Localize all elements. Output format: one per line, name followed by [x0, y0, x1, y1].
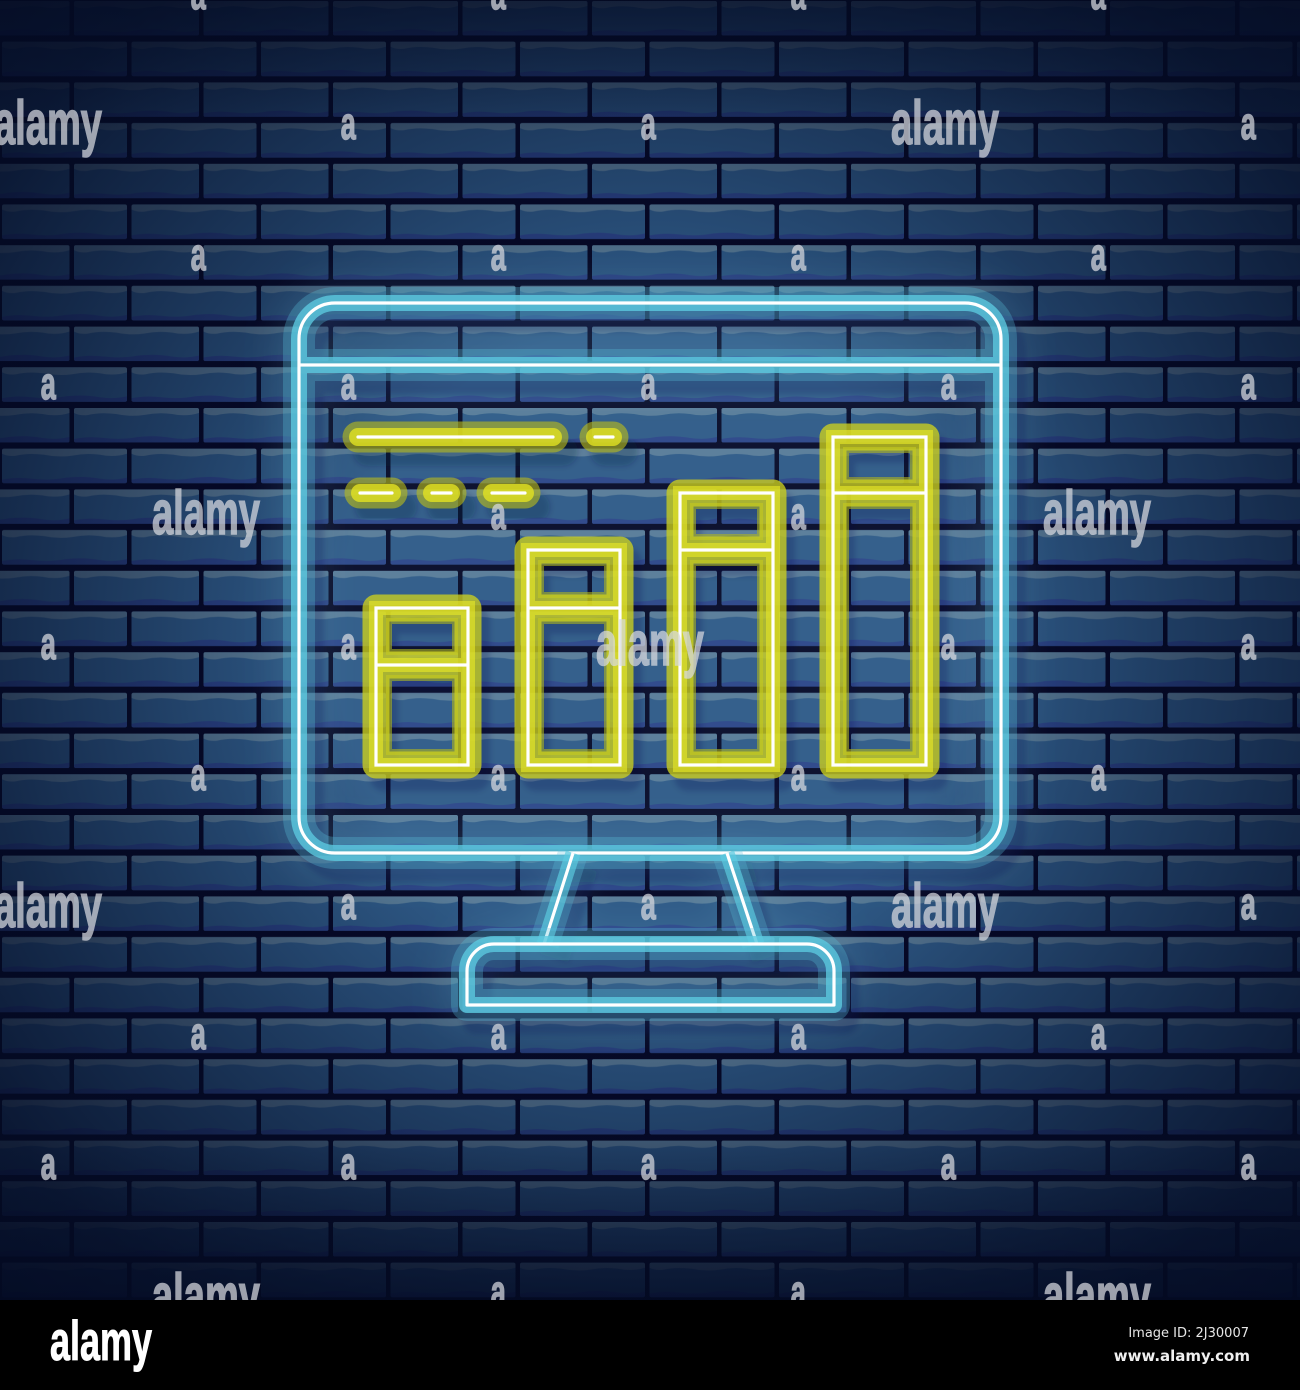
- large watermarks: [0, 89, 1151, 1331]
- small single-letter watermarks: aaa: [341, 878, 1256, 929]
- neon text placeholder lines: [358, 437, 623, 507]
- soft glow and cast shadow: [299, 303, 1011, 1019]
- large watermarks: alamy: [152, 1262, 260, 1331]
- small single-letter watermarks: aa: [491, 1266, 806, 1317]
- monitor base: [467, 944, 834, 1005]
- small single-letter watermarks: aaaaa: [41, 358, 1256, 409]
- footer logo: alamy: [50, 1309, 152, 1372]
- small single-letter watermarks: aaaa: [41, 618, 1256, 669]
- large watermarks: alamy: [596, 610, 704, 679]
- large watermarks: alamy: [1043, 479, 1151, 548]
- website: www.alamy.com: [1114, 1347, 1250, 1365]
- image id: Image ID: 2J30007: [1128, 1326, 1249, 1341]
- monitor stand: [544, 853, 757, 944]
- small single-letter watermarks: aaaa: [191, 1008, 1106, 1059]
- bar outlines: [376, 437, 926, 765]
- neon monitor: [299, 303, 1011, 1019]
- small single-letter watermarks: aaa: [341, 98, 1256, 149]
- bar glow layers: [376, 437, 934, 777]
- footer bar: [0, 1300, 1300, 1390]
- small single-letter watermarks: aa: [491, 488, 806, 539]
- small single-letter watermarks: aaaa: [191, 749, 1106, 800]
- neon bar chart: [376, 437, 934, 777]
- monitor screen frame: [299, 303, 1001, 853]
- small single-letter watermarks: aaaaa: [41, 1138, 1256, 1189]
- small single-letter watermarks: aaaa: [191, 229, 1106, 280]
- large watermarks: alamy: [152, 479, 260, 548]
- large watermarks: alamy: [1043, 1262, 1151, 1331]
- large watermarks: alamy: [891, 872, 999, 941]
- large watermarks: alamy: [891, 89, 999, 158]
